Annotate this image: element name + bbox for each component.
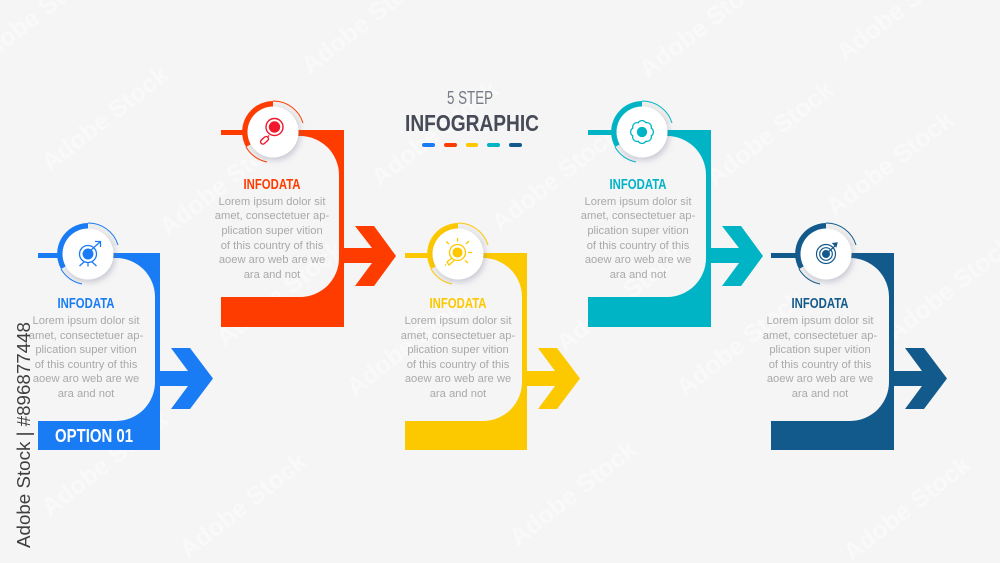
- body text: Lorem ipsum dolor sit: [585, 196, 692, 208]
- title: 5 step: 5 STEP: [447, 88, 493, 108]
- watermark pattern: Adobe Stock: [504, 436, 642, 552]
- body text: amet, consectetuer ap-: [763, 330, 877, 342]
- body text: [29, 315, 143, 400]
- watermark pattern: Adobe Stock: [551, 241, 689, 357]
- body text: amet, consectetuer ap-: [215, 210, 329, 222]
- body text: amet, consectetuer ap-: [581, 210, 695, 222]
- body text: of this country of this: [35, 359, 138, 371]
- body text: ara and not: [610, 269, 667, 281]
- body text: aoew aro web are we: [585, 254, 691, 266]
- heading: INFODATA: [792, 296, 849, 312]
- body text: of this country of this: [221, 240, 324, 252]
- body text: [215, 196, 329, 281]
- body text: aoew aro web are we: [219, 254, 325, 266]
- colour dashes: [422, 143, 522, 147]
- watermark pattern: Adobe Stock: [701, 76, 839, 192]
- bracket and arrow shape: [221, 130, 396, 327]
- connector line: [588, 130, 618, 135]
- bracket and arrow shape: [588, 130, 763, 327]
- body text: plication super vition: [35, 344, 137, 356]
- body text: plication super vition: [587, 225, 689, 237]
- connector line: [221, 130, 251, 135]
- body text: plication super vition: [221, 225, 323, 237]
- step 5 navy: [763, 223, 947, 450]
- option label: OPTION 01: [55, 426, 133, 446]
- watermark pattern: Adobe Stock: [821, 106, 959, 222]
- body text: of this country of this: [769, 359, 872, 371]
- body text: amet, consectetuer ap-: [29, 330, 143, 342]
- body text: ara and not: [58, 388, 115, 400]
- badge ring: [795, 223, 856, 284]
- body text: Lorem ipsum dolor sit: [405, 315, 512, 327]
- connector line: [771, 253, 801, 258]
- heading: INFODATA: [430, 296, 487, 312]
- watermark pattern: Adobe Stock: [671, 286, 809, 402]
- watermark pattern: Adobe Stock: [36, 406, 174, 522]
- body text: aoew aro web are we: [33, 373, 139, 385]
- watermark pattern: Adobe Stock: [486, 121, 624, 237]
- heading: INFODATA: [244, 177, 301, 193]
- badge ring: [611, 101, 672, 162]
- body text: of this country of this: [587, 240, 690, 252]
- step 1 blue: [29, 223, 213, 450]
- badge ring: [242, 101, 303, 162]
- icon: target with arrow: [80, 242, 100, 266]
- step 2 red: [215, 101, 396, 327]
- step 3 yellow: [401, 223, 580, 450]
- body text: Lorem ipsum dolor sit: [767, 315, 874, 327]
- watermark pattern: Adobe Stock: [174, 448, 312, 563]
- body text: Lorem ipsum dolor sit: [219, 196, 326, 208]
- watermark pattern: Adobe Stock: [154, 126, 292, 242]
- icon: gear: [631, 121, 653, 143]
- icon: bulb: [445, 238, 472, 266]
- watermark pattern: Adobe Stock: [366, 76, 504, 192]
- badge ring: [57, 223, 118, 284]
- title: infographic: INFOGRAPHIC: [405, 110, 539, 136]
- stock id label: Adobe Stock | #896877448: [13, 322, 34, 548]
- body text: plication super vition: [407, 344, 509, 356]
- body text: aoew aro web are we: [767, 373, 873, 385]
- body text: ara and not: [792, 388, 849, 400]
- bracket and arrow shape: [771, 253, 947, 450]
- body text: of this country of this: [407, 359, 510, 371]
- body text: aoew aro web are we: [405, 373, 511, 385]
- bracket and arrow shape: [405, 253, 580, 450]
- bracket and arrow shape: [38, 253, 213, 450]
- body text: amet, consectetuer ap-: [401, 330, 515, 342]
- icon: target: [816, 243, 837, 264]
- connector line: [405, 253, 435, 258]
- watermark pattern: Adobe Stock: [211, 236, 349, 352]
- heading: INFODATA: [58, 296, 115, 312]
- body text: ara and not: [244, 269, 301, 281]
- body text: [401, 315, 515, 400]
- icon: magnifier: [260, 118, 283, 145]
- title block: [405, 88, 539, 147]
- body text: [581, 196, 695, 281]
- connector line: [38, 253, 68, 258]
- body text: Lorem ipsum dolor sit: [33, 315, 140, 327]
- body text: plication super vition: [769, 344, 871, 356]
- body text: ara and not: [430, 388, 487, 400]
- badge ring: [427, 223, 488, 284]
- watermark pattern: Adobe Stock: [36, 61, 174, 177]
- body text: [763, 315, 877, 400]
- watermark pattern: Adobe Stock: [341, 286, 479, 402]
- heading: INFODATA: [610, 177, 667, 193]
- step 4 teal: [581, 101, 763, 327]
